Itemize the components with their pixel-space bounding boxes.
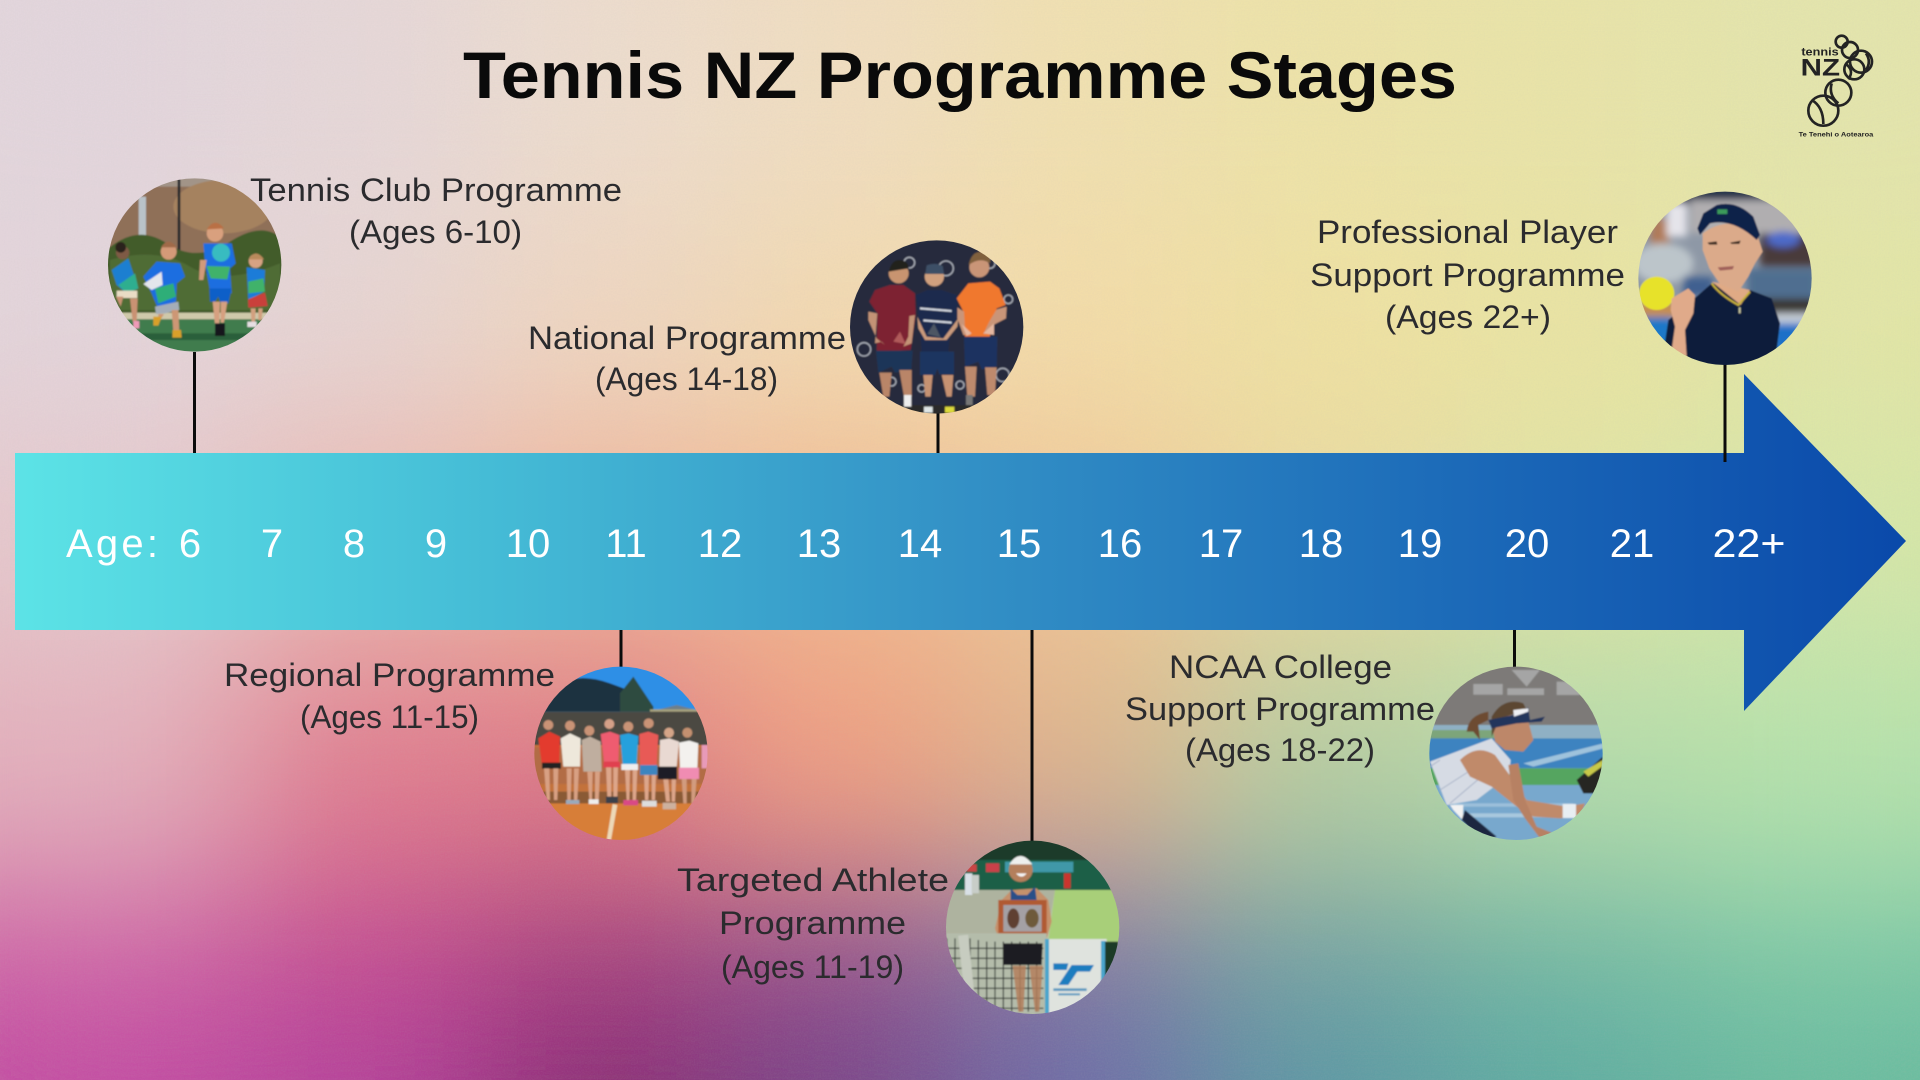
label: Targeted Athlete Programme: (Ages 11-19) [721,949,904,985]
age scale: 11 [605,522,647,566]
label: National Programme [528,320,846,397]
age scale: 15 [997,522,1041,566]
photo: children running [108,178,282,352]
label: Professional Player Support Programme [1310,214,1625,335]
photo: professional player with fist [1638,192,1812,365]
logo: Tennis NZ [1799,36,1874,138]
age scale: 9 [425,522,447,566]
label: National Programme: National Programme [528,320,846,356]
label: NCAA College Support Programme: Support Programme [1125,691,1435,727]
age scale: 7 [261,522,283,566]
label: Tennis Club Programme [250,172,622,250]
age scale [66,522,1786,566]
logo: Tennis NZ: Te Tenehi o Aotearoa [1799,132,1874,138]
label: NCAA College Support Programme [1125,649,1435,768]
age scale: 18 [1299,522,1343,566]
age scale: 8 [343,522,365,566]
timeline arrow [15,374,1906,711]
label: Regional Programme: Regional Programme [224,657,555,693]
age scale: 13 [797,522,841,566]
photo: targeted athlete with plaque [943,838,1123,1018]
label: Professional Player Support Programme: Professional Player [1317,214,1618,250]
age scale: 6 [179,522,201,566]
photo: regional programme squad [534,666,708,840]
age scale: 10 [506,522,550,566]
age scale: 16 [1098,522,1142,566]
label: Targeted Athlete Programme: Targeted Athlete [677,862,949,898]
age scale: 14 [898,522,942,566]
label: Regional Programme [224,657,555,735]
age scale: 22+ [1712,522,1786,566]
age scale: Age: [66,522,158,566]
label: Regional Programme: (Ages 11-15) [300,699,479,735]
connector lines [194,352,1725,843]
label: NCAA College Support Programme: NCAA College [1169,649,1392,685]
label: NCAA College Support Programme: (Ages 18-22) [1185,732,1375,768]
age scale: 19 [1398,522,1442,566]
label: National Programme: (Ages 14-18) [595,361,778,397]
line over arrow [1724,440,1726,462]
label: Targeted Athlete Programme: Programme [719,905,906,941]
age scale: 12 [698,522,742,566]
photo: three players with trophies [847,237,1027,417]
age scale: 20 [1505,522,1549,566]
label: Professional Player Support Programme: (Ages 22+) [1385,299,1551,335]
age scale: 17 [1199,522,1243,566]
logo: Tennis NZ: NZ [1801,55,1840,82]
label: Targeted Athlete Programme [677,862,949,985]
logo: Tennis NZ: tennis [1801,47,1839,59]
photo: NCAA player at net [1427,663,1607,842]
age scale: 21 [1610,522,1654,566]
title: Tennis NZ Programme Stages [463,38,1457,112]
label: Professional Player Support Programme: Support Programme [1310,257,1625,293]
label: Tennis Club Programme: Tennis Club Programme [250,172,622,208]
label: Tennis Club Programme: (Ages 6-10) [349,214,522,250]
